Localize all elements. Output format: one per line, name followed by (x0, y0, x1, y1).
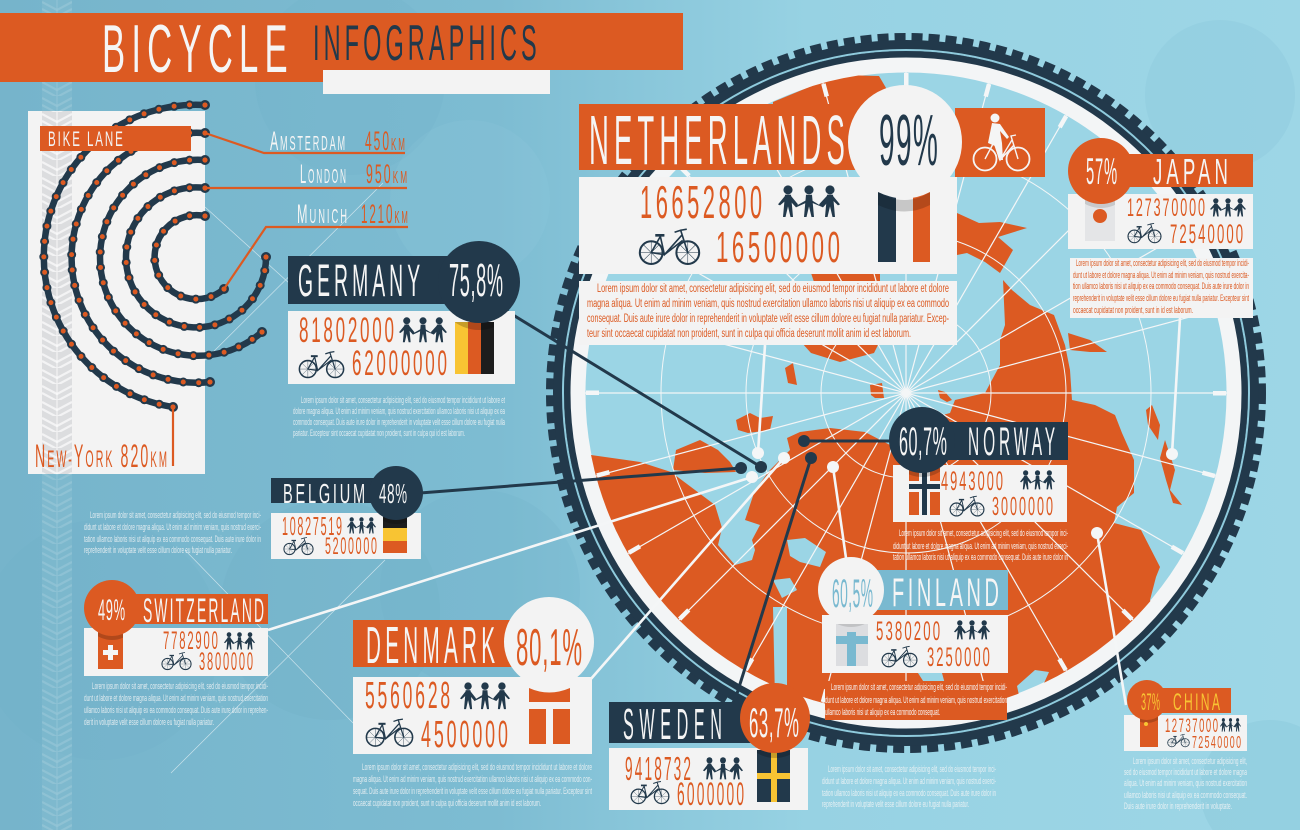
title banner: INFOGRAPHICS (313, 16, 537, 72)
text block: Norway on map: didunt ut labore et dolore magna aliqua. Ut enim ad minim veniam, quis nostrud exerci- (893, 541, 1068, 551)
leader lines and map pins (268, 310, 1180, 705)
distance leaders and labels (35, 127, 408, 475)
panel: Netherlands: 99% (879, 100, 938, 181)
text block: left of Belgium: reprehenderit in voluptate velit esse cillum dolore eu fugiat nulla pariatur. (84, 545, 232, 555)
text block: Netherlands: Lorem ipsum dolor sit amet, consectetur adipisicing elit, sed do eiusmod tempor incididunt ut labore et dolore (597, 283, 949, 295)
panel: China (1124, 680, 1247, 753)
text block: Switzerland: derit in voluptate velit esse cillum dolore eu fugiat nulla pariatur. (84, 717, 214, 727)
icon: people (1220, 718, 1241, 732)
icon: bicycle (640, 229, 699, 264)
panel: Sweden: SWEDEN (623, 701, 722, 750)
panel: China: 72540000 (1192, 733, 1241, 753)
panel: Sweden: 6000000 (677, 778, 744, 813)
panel: Belgium (271, 466, 423, 559)
text block: China (1124, 756, 1247, 811)
flag (529, 688, 570, 744)
text block: Switzerland (84, 681, 268, 727)
panel: Switzerland: 3800000 (199, 649, 253, 676)
distance leaders and labels: 450KM (365, 127, 405, 156)
panel: China: 12737000 (1165, 716, 1218, 737)
text block: Denmark: sequat. Duis aute irure dolor in reprehenderit in voluptate velit esse cillum dolore eu fugiat nulla pariatur. Excepteur sint (353, 786, 592, 796)
wheel tyre (550, 37, 1262, 749)
panel: China: CHINA (1173, 690, 1220, 716)
icon: bicycle (1128, 223, 1161, 243)
text block: Denmark (353, 762, 592, 808)
panel: Netherlands (579, 85, 1045, 274)
text block: below wheel: didunt ut labore et dolore magna aliqua. Ut enim ad minim veniam, quis nostrud exerci- (822, 776, 996, 786)
flag (455, 322, 494, 374)
flag (1140, 716, 1158, 747)
flag (878, 190, 930, 262)
text block: Switzerland: Lorem ipsum dolor sit amet, consectetur adipisicing elit, sed do eiusmod tempor incidi- (92, 681, 268, 691)
title banner (0, 12, 683, 94)
text block: Switzerland: ullamco laboris nisi ut aliquip ex ea commodo consequat. Duis aute irure dolor in reprehen- (84, 705, 268, 715)
text block: Finland on orange: Lorem ipsum dolor sit amet, consectetur adipisicing elit, sed do eiusmod tempor incidi- (831, 682, 1007, 692)
panel: Finland: 5380200 (876, 616, 940, 646)
panel: Germany: 81802000 (299, 310, 394, 350)
panel: Belgium: 5200000 (325, 532, 377, 559)
icon: bicycle (284, 538, 313, 555)
flag (836, 624, 868, 666)
icon: people (399, 317, 447, 342)
distance leaders and labels: 950KM (366, 160, 407, 189)
text block: Germany: Lorem ipsum dolor sit amet, consectetur adipisicing elit, sed do eiusmod tempor incididunt ut labore et (301, 395, 505, 405)
icon: people (703, 757, 743, 779)
icon: bicycle (631, 782, 669, 804)
wheel spokes and grid (585, 72, 1227, 714)
panel: Germany: 75,8% (449, 255, 503, 307)
panel: Finland: 60,5% (832, 572, 873, 616)
panel: Norway: 4943000 (941, 467, 1003, 496)
icon: bicycle (162, 652, 191, 670)
text block: Netherlands: magna aliqua. Ut enim ad minim veniam, quis nostrud exercitation ullamco laboris nisi ut aliquip ex ea commodo (587, 298, 949, 310)
text: dolore magna aliqua. Ut enim ad minim veniam, quis nostrud exercitation ullamco laboris nisi ut aliquip ex ea (293, 406, 505, 416)
panel: Finland: FINLAND (892, 569, 999, 615)
distance leaders and labels: MUNICH (297, 200, 347, 229)
panel: Denmark (353, 597, 594, 756)
icon: people (347, 517, 376, 534)
icon: bicycle (950, 496, 984, 516)
panel: Netherlands: NETHERLANDS (589, 102, 845, 180)
text block: Denmark: Lorem ipsum dolor sit amet, consectetur adipisicing elit, sed do eiusmod tempor incididunt ut labore et dolore (362, 762, 592, 772)
text block: Switzerland: dunt ut labore et dolore magna aliqua. Ut enim ad minim veniam, quis nostrud exercitation (84, 693, 268, 703)
text block: below wheel: reprehenderit in voluptate velit esse cillum dolore eu fugiat nulla pariatur. (822, 799, 969, 809)
text block: Finland on orange: dunt ut labore et dolore magna aliqua. Ut enim ad minim veniam, quis nostrud exercitation (825, 695, 1007, 705)
flag (383, 516, 407, 553)
panel: Denmark: 80,1% (516, 619, 582, 677)
panel: Norway (889, 407, 1068, 522)
panel: Sweden: 63,7% (749, 699, 799, 746)
panel: Netherlands: 16652800 (640, 176, 762, 228)
panel: Germany: GERMANY (298, 257, 420, 306)
text block: below wheel (822, 764, 996, 809)
panel: Belgium: 48% (379, 477, 407, 509)
panel: Switzerland: 49% (98, 593, 125, 626)
panel: Sweden (609, 683, 810, 813)
panel: Norway: 3000000 (992, 493, 1053, 521)
tyre track (42, 0, 72, 830)
panel: Japan (1068, 138, 1253, 249)
chain arcs (44, 100, 271, 412)
panel: Denmark: 4500000 (421, 714, 508, 756)
title banner: BICYCLE (102, 12, 288, 87)
icon: bicycle (366, 719, 413, 746)
flag (757, 750, 790, 802)
bike lane label (40, 126, 191, 151)
panel: Belgium: 10827519 (282, 513, 342, 542)
text block: Finland on orange (825, 681, 1007, 720)
text block: Denmark: magna aliqua. Ut enim ad minim veniam, quis nostrud exercitation ullamco laboris nisi ut aliquip ex ea commodo con- (353, 774, 592, 784)
icon: bicycle (1168, 734, 1189, 747)
panel: Denmark: 5560628 (365, 675, 450, 717)
panel: Japan: 57% (1086, 150, 1117, 192)
panel: Japan: 127370000 (1127, 194, 1205, 222)
panel: Sweden: 9418732 (625, 751, 691, 788)
panel: Denmark: DENMARK (366, 617, 495, 675)
icon: people (954, 620, 990, 639)
distance leaders and labels: 1210KM (361, 200, 408, 229)
panel: Finland: 3250000 (927, 643, 990, 672)
text block: Netherlands: teur sint occaecat cupidatat non proident, sunt in culpa qui officia deserunt mollit anim id est laborum. (587, 328, 911, 340)
panel: Belgium: BELGIUM (283, 478, 365, 509)
panel: Japan: JAPAN (1153, 153, 1228, 193)
text block: below wheel: tation ullamco laboris nisi ut aliquip ex ea commodo consequat. Duis aute irure dolor in (822, 788, 996, 798)
text block: Netherlands (579, 281, 957, 345)
text block: Germany (293, 395, 505, 438)
text block: left of Belgium: tation ullamco laboris nisi ut aliquip ex ea commodo consequat. Duis aute irure dolor in (84, 534, 261, 544)
flag (909, 468, 940, 515)
panel: China: 37% (1141, 689, 1160, 715)
panel: Switzerland: SWITZERLAND (143, 591, 264, 630)
text block: left of Belgium: didunt ut labore et dolore magna aliqua. Ut enim ad minim veniam, quis nostrud exerci- (84, 522, 261, 532)
text block: Norway on map: tation ullamco laboris nisi ut aliquip ex ea commodo consequat. Duis aute irure dolor in (893, 552, 1068, 562)
distance leaders and labels: NEW-YORK 820KM (35, 440, 167, 475)
icon: people (1020, 470, 1055, 489)
panel: Finland (818, 557, 1008, 673)
icon: people (1210, 198, 1246, 216)
text block: Denmark: occaecat cupidatat non proident, sunt in culpa qui officia deserunt mollit anim id est laborum. (353, 798, 541, 808)
text block: Norway on map (893, 528, 1068, 562)
flag (1085, 200, 1115, 241)
text block: Finland on orange: ullamco laboris nisi ut aliquip ex ea commodo consequat. (825, 707, 940, 717)
icon: people (778, 185, 840, 217)
text block: left of Belgium (84, 510, 261, 555)
text block: Germany: pariatur. Excepteur sint occaecat cupidatat non proident, sunt in culpa qui id est laborum. (293, 428, 465, 438)
panel: Norway: 60,7% (899, 420, 947, 464)
text: Lorem ipsum dolor sit amet, consectetur adipisicing elit, sed do eiusmod tempor inci- (828, 764, 996, 774)
icon: people (224, 632, 255, 649)
panel: bike lane (28, 111, 205, 474)
distance leaders and labels: LONDON (300, 159, 346, 190)
icon: bicycle (299, 352, 344, 378)
icon: cyclist (974, 114, 1030, 170)
bike lane label: BIKE LANE (48, 127, 123, 151)
tyre track on panel (42, 111, 72, 474)
panel: Netherlands: 16500000 (716, 223, 840, 272)
distance leaders and labels: AMSTERDAM (270, 127, 345, 156)
icon: bicycle (882, 646, 917, 667)
icon: people (460, 682, 510, 709)
world map (591, 76, 1182, 704)
text block: Netherlands: consequat. Duis aute irure dolor in reprehenderit in voluptate velit esse cillum dolore eu fugiat nulla pariatur. Excep- (587, 313, 949, 325)
flag (98, 632, 123, 669)
text block: Japan (1070, 258, 1253, 318)
text block: Japan: occaecat cupidatat non proident, sunt in id est laborum. (1073, 305, 1193, 315)
panel: Switzerland (84, 580, 268, 676)
text block: Norway on map: Lorem ipsum dolor sit amet, consectetur adipisicing elit, sed do eiusmod tempor inci- (899, 528, 1068, 538)
panel: Germany (288, 241, 520, 384)
panel: Norway: NORWAY (968, 421, 1055, 464)
text: commodo consequat. Duis aute irure dolor in reprehenderit in voluptate velit esse cillum dolore eu fugiat nulla (293, 417, 505, 427)
panel: Japan: 72540000 (1170, 220, 1243, 249)
panel: Switzerland: 7782900 (163, 627, 218, 655)
panel: Germany: 62000000 (352, 343, 447, 383)
text block: left of Belgium: Lorem ipsum dolor sit amet, consectetur adipisicing elit, sed do eiusmod tempor inci- (90, 510, 261, 520)
